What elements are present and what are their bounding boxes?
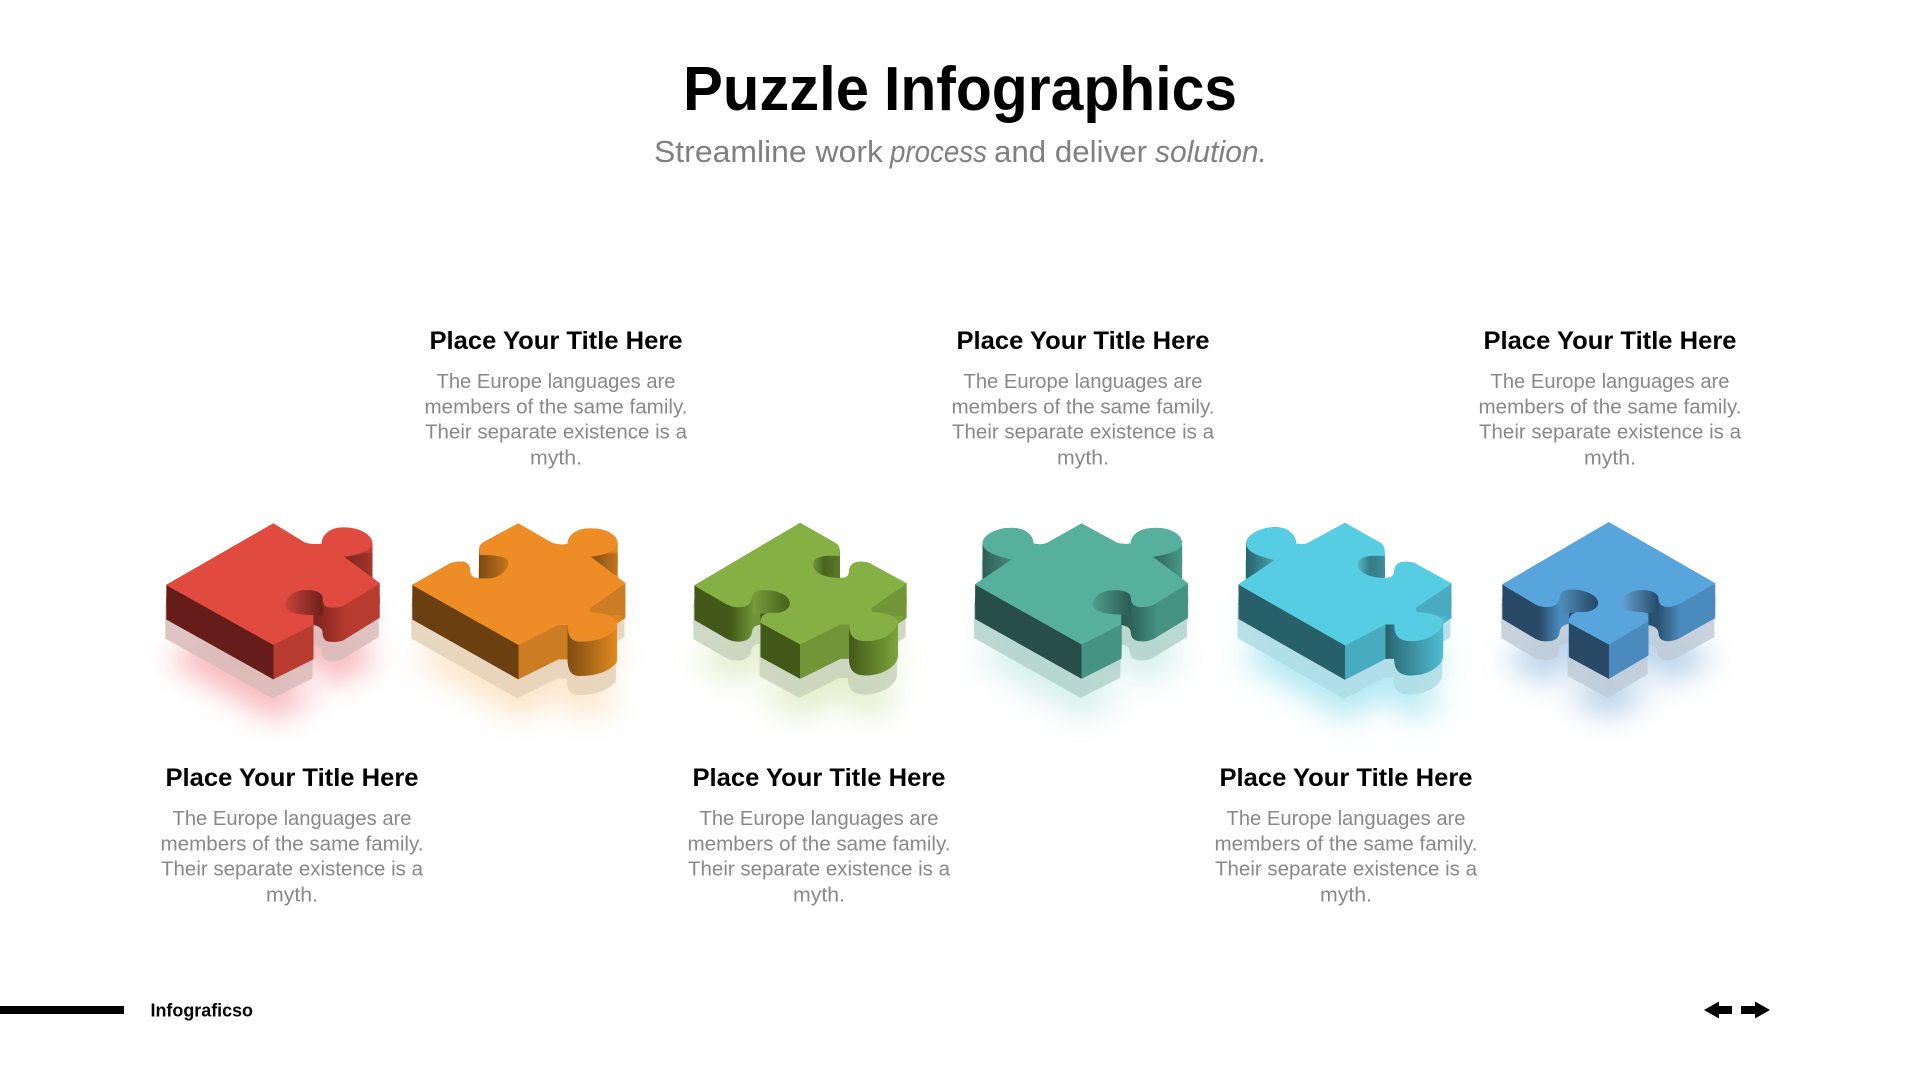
- text block: item 2: Place Your Title Here: [430, 327, 683, 355]
- footer bar: [0, 1006, 124, 1014]
- text block: item 3: [688, 764, 951, 906]
- text block: item 3: members of the same family.: [688, 832, 950, 856]
- text block: item 2: members of the same family.: [424, 396, 688, 418]
- title: Infographics: [884, 55, 1237, 124]
- icon: left arrow: [1704, 1002, 1732, 1018]
- text block: item 3: Place Your Title Here: [692, 764, 946, 792]
- text block: item 1: Place Your Title Here: [166, 764, 419, 792]
- text block: item 4: [952, 327, 1215, 470]
- puzzle piece: teal: [973, 519, 1193, 719]
- text block: item 6: The Europe languages are: [1490, 370, 1730, 393]
- text block: item 4: myth.: [1057, 446, 1109, 470]
- text block: item 6: [1478, 327, 1742, 470]
- title: [683, 55, 1237, 124]
- subtitle: [654, 134, 1267, 169]
- text block: item 2: [424, 327, 688, 470]
- text block: item 1: myth.: [266, 884, 318, 906]
- text block: item 6: myth.: [1584, 446, 1636, 470]
- text block: item 3: The Europe languages are: [700, 807, 938, 830]
- text block: item 6: Place Your Title Here: [1484, 327, 1737, 355]
- subtitle: solution.: [1155, 134, 1267, 169]
- text block: item 4: Place Your Title Here: [956, 327, 1210, 355]
- text block: item 1: Their separate existence is a: [161, 858, 424, 880]
- text block: item 1: The Europe languages are: [172, 807, 412, 830]
- text block: item 4: members of the same family.: [952, 396, 1214, 418]
- puzzle piece: red: [163, 520, 383, 720]
- text block: item 2: myth.: [530, 446, 582, 470]
- subtitle: process: [889, 134, 987, 169]
- text block: item 5: Their separate existence is a: [1215, 858, 1478, 880]
- text block: item 6: Their separate existence is a: [1479, 420, 1742, 444]
- text block: item 5: [1214, 764, 1478, 906]
- text block: item 1: [160, 764, 424, 906]
- puzzle piece: green: [691, 519, 911, 719]
- text block: item 2: The Europe languages are: [436, 370, 676, 393]
- text block: item 4: The Europe languages are: [964, 370, 1202, 393]
- text block: item 4: Their separate existence is a: [952, 420, 1215, 444]
- text block: item 5: The Europe languages are: [1226, 807, 1466, 830]
- subtitle: and deliver: [994, 134, 1147, 169]
- text block: item 2: Their separate existence is a: [425, 420, 688, 444]
- subtitle: Streamline work: [654, 134, 884, 169]
- text block: item 1: members of the same family.: [160, 832, 424, 856]
- text block: item 5: members of the same family.: [1214, 832, 1478, 856]
- puzzle piece: cyan: [1236, 519, 1456, 720]
- puzzle piece: blue: [1499, 519, 1720, 719]
- icon: right arrow: [1741, 1002, 1770, 1018]
- text block: item 6: members of the same family.: [1478, 396, 1742, 418]
- text block: item 3: Their separate existence is a: [688, 858, 951, 880]
- puzzle piece: orange: [410, 520, 630, 720]
- text block: item 3: myth.: [793, 884, 845, 906]
- title: Puzzle: [683, 55, 869, 124]
- text block: item 5: myth.: [1320, 884, 1372, 906]
- text block: item 5: Place Your Title Here: [1220, 764, 1473, 792]
- footer brand: Infograficso: [150, 1000, 253, 1020]
